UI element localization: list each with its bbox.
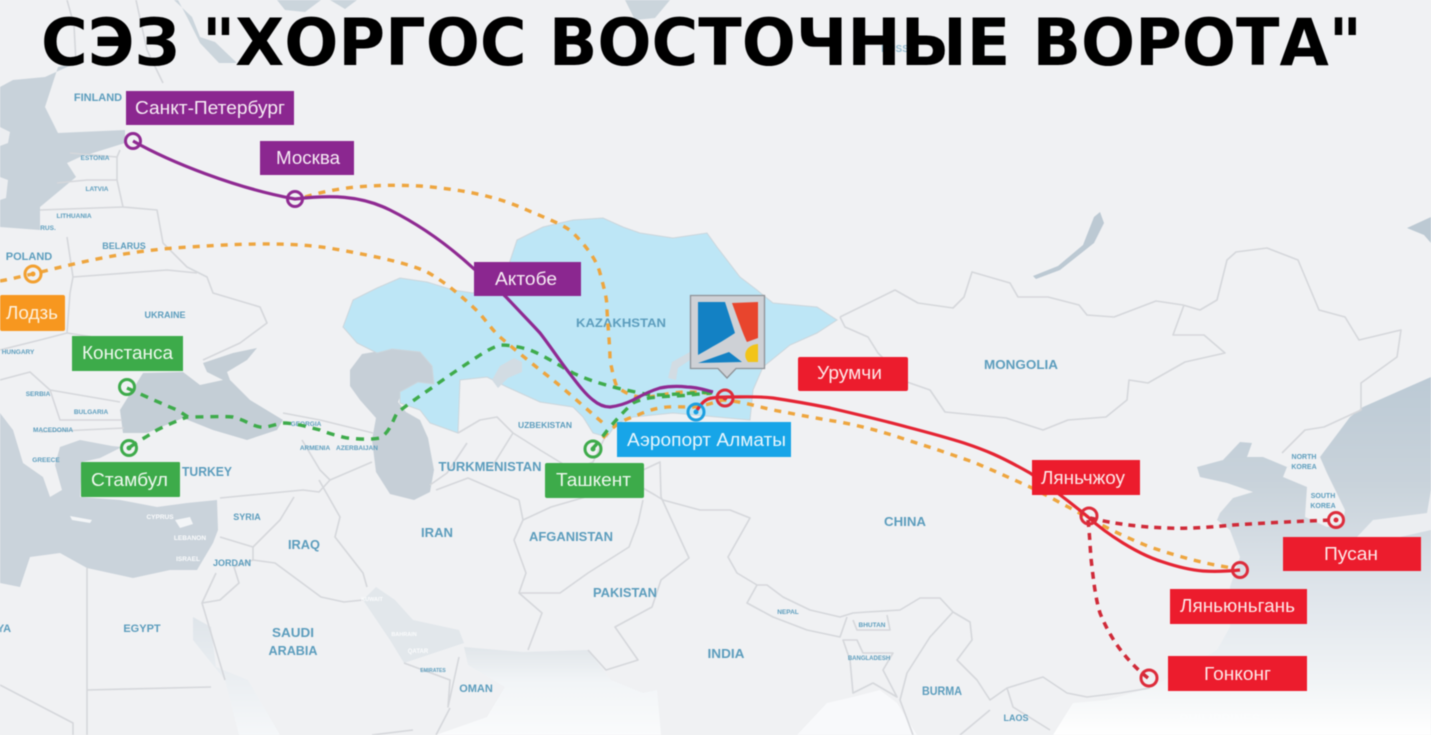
green routes <box>127 345 712 448</box>
label: Констанса <box>72 336 183 371</box>
label: Констанса: Констанса <box>82 343 174 363</box>
country name labels: KAZAKHSTAN <box>576 316 666 330</box>
country name labels: GREECE <box>32 457 60 464</box>
label: Ляньюньгань <box>1170 589 1307 624</box>
country name labels: KUWAIT <box>361 597 383 603</box>
label: Урумчи <box>798 357 908 391</box>
country name labels: BULGARIA <box>74 409 108 416</box>
country name labels: SERBIA <box>26 391 51 398</box>
country name labels: CYPRUS <box>146 514 174 521</box>
country name labels: ISRAEL <box>176 556 200 563</box>
country name labels: LEBANON <box>174 535 206 542</box>
country name labels: QATAR <box>408 649 429 655</box>
country name labels: OMAN <box>459 683 493 695</box>
red routes <box>697 397 1335 678</box>
country name labels: KOREA <box>1291 464 1317 471</box>
country name labels: TURKEY <box>182 464 232 479</box>
country name labels: SAUDI <box>272 625 314 640</box>
country name labels: BANGLADESH <box>848 656 890 662</box>
country name labels: FINLAND <box>74 92 122 104</box>
label: Санкт-Петербург <box>126 91 294 125</box>
label: Гонконг <box>1168 656 1307 691</box>
country name labels: ESTONIA <box>81 155 110 162</box>
country name labels: PHILIPPINES <box>1180 711 1261 726</box>
country name labels: RUS. <box>40 225 56 232</box>
country name labels: LAOS <box>1003 713 1029 723</box>
country name labels: NORTH <box>1292 454 1316 461</box>
label: Ташкент: Ташкент <box>556 470 631 490</box>
country name labels: SOUTH <box>1311 493 1335 500</box>
country name labels: UKRAINE <box>144 310 186 320</box>
country name labels: AFGANISTAN <box>529 529 613 544</box>
label: Ляньюньгань: Ляньюньгань <box>1180 596 1295 616</box>
label: Стамбул: Стамбул <box>91 470 168 490</box>
label: Лодзь: Лодзь <box>6 303 58 323</box>
label: Москва: Москва <box>276 148 341 168</box>
label: Ляньчжоу: Ляньчжоу <box>1041 468 1125 488</box>
country name labels: IRAN <box>421 525 453 540</box>
label: Аэропорт Алматы: Аэропорт Алматы <box>627 430 786 450</box>
country name labels: TURKMENISTAN <box>438 459 542 474</box>
country name labels: HUNGARY <box>2 349 35 356</box>
country name labels: MONGOLIA <box>984 357 1059 372</box>
Kazakhstan territory <box>343 218 837 437</box>
label: Ляньчжоу <box>1032 460 1140 495</box>
country name labels: BHUTAN <box>859 622 886 629</box>
label: Аэропорт Алматы <box>617 422 791 457</box>
country name labels: BAHRAIN <box>391 632 417 638</box>
country name labels: RUSSIA <box>881 44 919 55</box>
country name labels: SYRIA <box>233 512 261 522</box>
orange routes <box>0 185 1233 568</box>
route markers <box>25 134 1344 686</box>
country name labels: GEORGIA <box>291 421 322 428</box>
label: Актобе <box>474 262 581 296</box>
label: Москва <box>260 141 354 175</box>
label: Пусан: Пусан <box>1324 544 1378 564</box>
label: Санкт-Петербург: Санкт-Петербург <box>135 98 285 118</box>
label: Пусан <box>1283 537 1421 571</box>
country name labels: KOREA <box>1310 503 1336 510</box>
country name labels: LITHUANIA <box>56 213 92 220</box>
country name labels: JORDAN <box>213 558 251 568</box>
label: Гонконг: Гонконг <box>1204 664 1271 684</box>
country name labels: AZERBAIJAN <box>336 445 378 452</box>
logo: Khorgos map pin <box>690 296 764 378</box>
country name labels: ARABIA <box>268 643 318 658</box>
title: СЭЗ "ХОРГОС ВОСТОЧНЫЕ ВОРОТА" <box>41 6 1362 81</box>
label: Урумчи: Урумчи <box>817 363 882 383</box>
country name labels: LATVIA <box>86 186 109 193</box>
country name labels: ARMENIA <box>300 445 330 452</box>
country name labels: MACEDONIA <box>33 427 73 434</box>
country name labels: INDIA <box>708 646 745 661</box>
country name labels: PAKISTAN <box>593 585 657 600</box>
label: Лодзь <box>0 295 65 331</box>
purple route <box>133 141 713 407</box>
country name labels: BELARUS <box>102 241 146 251</box>
label: Стамбул <box>81 462 180 497</box>
country name labels: POLAND <box>6 251 52 263</box>
country name labels: IRAQ <box>288 537 320 552</box>
country name labels: EGYPT <box>123 623 161 635</box>
country name labels: BURMA <box>922 686 962 698</box>
label: Актобе: Актобе <box>495 269 557 289</box>
label: Ташкент <box>545 463 644 498</box>
country name labels: EMIRATES <box>420 668 446 674</box>
country name labels: NEPAL <box>777 609 799 616</box>
country name labels: UZBEKISTAN <box>518 420 572 430</box>
Aral Sea and Balkhash <box>492 352 690 388</box>
country name labels: CHINA <box>884 514 927 529</box>
